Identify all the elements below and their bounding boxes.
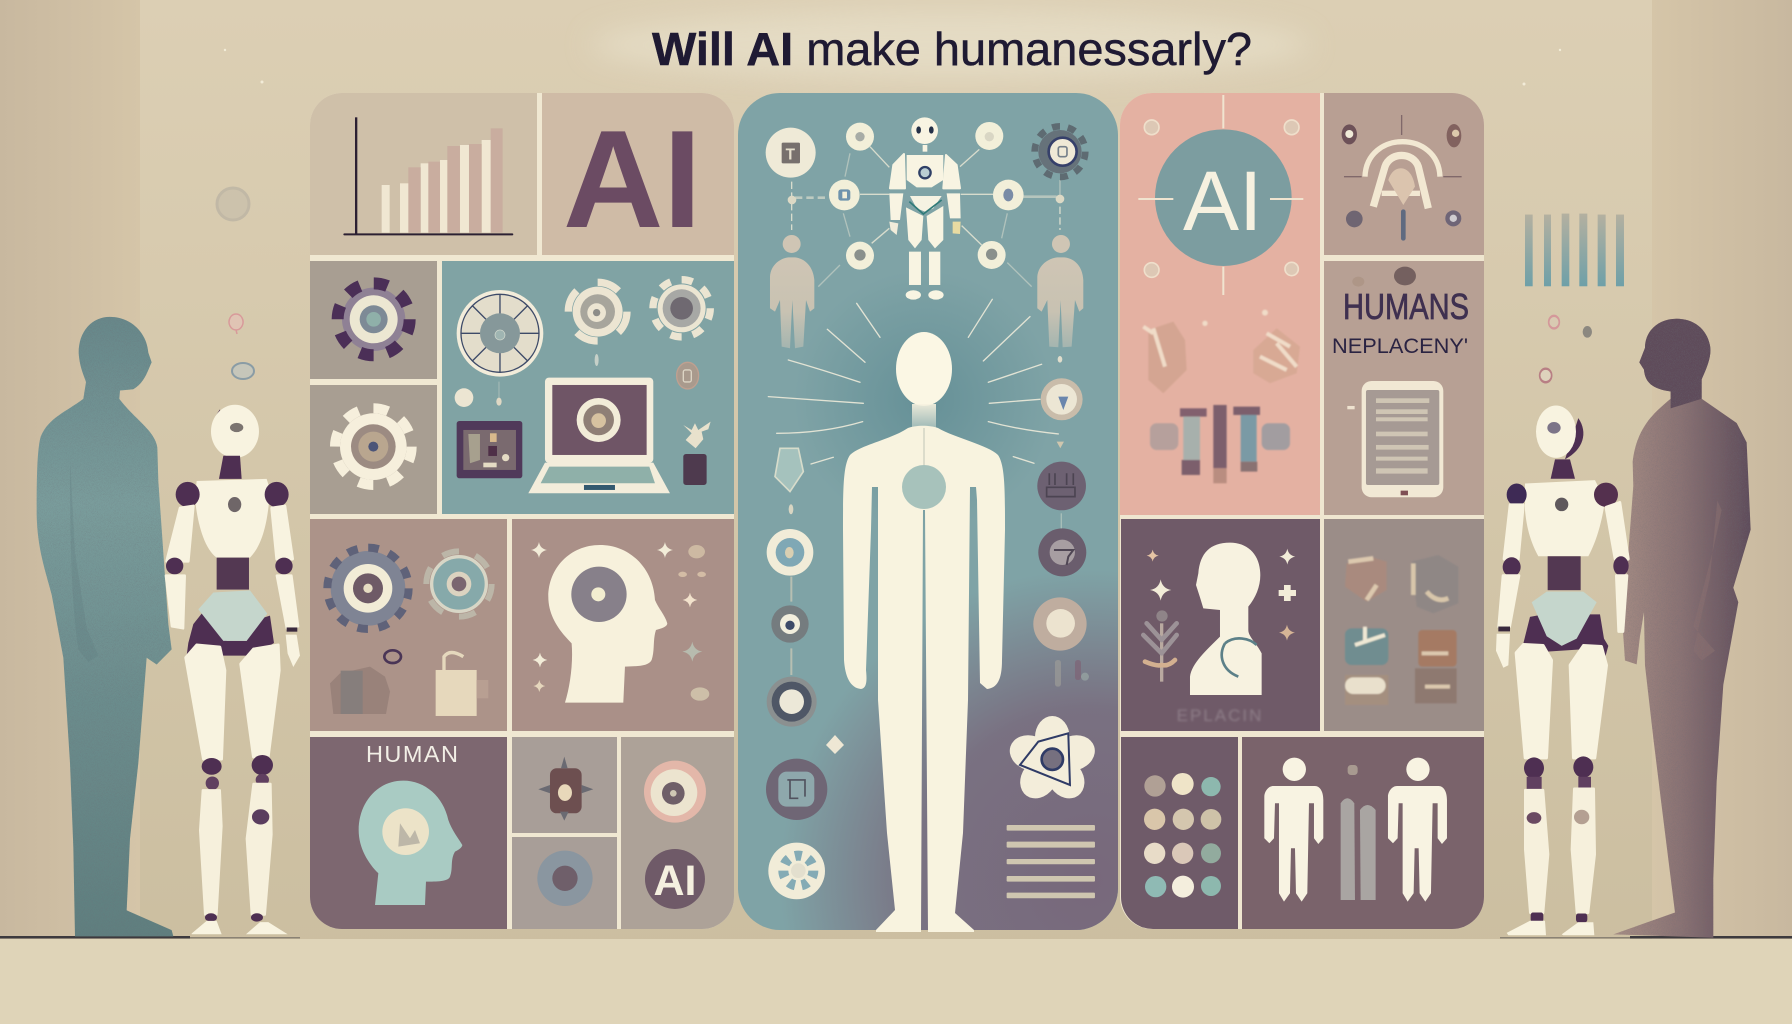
network nodes	[788, 122, 1064, 270]
icon: flower badge	[768, 843, 825, 899]
label: NEPLACENY: NEPLACENY'	[1332, 334, 1468, 358]
panel: AI letters: I	[663, 102, 702, 257]
connector lines	[792, 147, 1060, 287]
icon: person left	[1264, 758, 1323, 902]
icon: dark gear	[1035, 126, 1085, 177]
left decorative icons	[217, 188, 254, 379]
icon: grey circle	[1038, 528, 1086, 576]
blurred collage	[1143, 310, 1300, 483]
chart: right bars	[1525, 214, 1624, 286]
center bars	[1341, 765, 1376, 900]
panel: gear cream	[310, 385, 437, 514]
panel: ring and AI badge	[621, 737, 734, 929]
panel: AI letters	[542, 93, 734, 257]
icon: dark tile	[457, 421, 522, 478]
icon: dark code circle	[1037, 462, 1086, 510]
icon: cog two	[653, 280, 710, 337]
icon: robot	[889, 117, 961, 300]
panel: humans replacement	[1324, 261, 1484, 515]
figure: left robot	[166, 405, 300, 934]
panel: two people	[1242, 737, 1484, 929]
icon: tan disc	[1033, 597, 1087, 651]
icon: wheel	[457, 290, 543, 377]
panel: gear dark	[310, 261, 437, 379]
icon: laptop	[528, 378, 670, 493]
panel group: left grid	[310, 93, 734, 929]
panel: pink AI	[1120, 93, 1320, 515]
icon: tile badge: T	[786, 146, 796, 163]
panel: AI letters: A	[563, 102, 663, 257]
figure: right robot	[1496, 406, 1629, 935]
title: Will AI make humanessarly?	[652, 23, 1252, 75]
panel: teal tools	[442, 261, 734, 514]
panel: arch icon	[1324, 93, 1484, 255]
icon: tile badge	[766, 128, 816, 178]
label: HUMANS: HUMANS	[1343, 286, 1469, 327]
icon: pale blob	[775, 448, 803, 492]
panel: gears and lock	[310, 519, 507, 731]
icon: door badge	[766, 759, 827, 820]
label: AI in circle: AI	[1183, 154, 1262, 248]
floor	[0, 936, 1792, 1024]
chart bars	[343, 117, 513, 235]
panel: center column	[738, 93, 1118, 932]
icon: person right	[1388, 758, 1447, 902]
icon: target ring	[767, 677, 817, 727]
label: AI badge: AI	[654, 857, 696, 905]
text lines	[1007, 825, 1095, 898]
right decorative icons	[1540, 316, 1592, 382]
icon: plant	[1143, 610, 1177, 682]
figure: central human	[843, 332, 1005, 932]
label: HUMAN: HUMAN	[366, 741, 458, 767]
diagram: lower side icons	[766, 513, 1099, 899]
figure: left human silhouette	[37, 317, 173, 936]
icon: tablet	[1347, 381, 1443, 497]
panel: blurred icons	[1324, 519, 1484, 731]
panel: bar chart	[310, 93, 537, 255]
panel: human head	[310, 737, 507, 929]
panel: small icon brown	[512, 737, 617, 833]
icon: atom flower	[1005, 716, 1099, 806]
figure: right human silhouette	[1613, 319, 1751, 938]
panel: small icon round	[512, 837, 617, 929]
icon: cog one	[568, 282, 627, 341]
panel: head profile with sparkles	[512, 519, 734, 731]
panel: bust profile	[1121, 519, 1320, 731]
icon: teal ring	[767, 529, 813, 576]
icon: teal head	[359, 781, 462, 905]
panel: dot matrix	[1121, 737, 1238, 929]
rays around central figure	[768, 299, 1058, 464]
icon: eye ring	[771, 605, 809, 643]
diagram: robot network	[766, 117, 1086, 514]
label: faded replacing: EPLACIN	[1177, 706, 1263, 725]
icon: small person left	[770, 235, 814, 348]
icon: small person right	[1037, 235, 1083, 347]
panel group: right grid	[1120, 93, 1484, 929]
icon: tan circle	[1041, 378, 1083, 420]
